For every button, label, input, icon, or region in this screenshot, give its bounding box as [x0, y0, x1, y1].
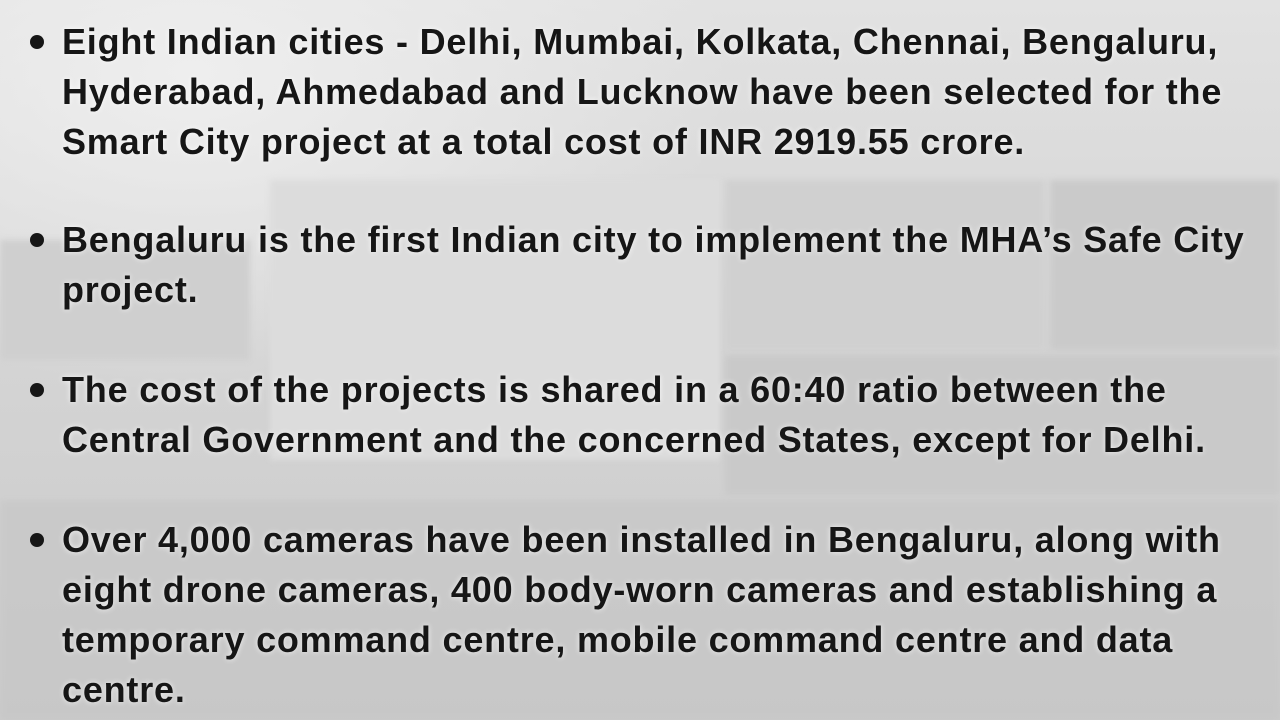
- bullet 4: cameras: Over 4,000 cameras have been installed in Bengaluru, along with: [62, 519, 1221, 560]
- bullet 3: cost sharing: Central Government and the concerned States, except for Delhi.: [62, 419, 1206, 460]
- bullet 2: Bengaluru first: Bengaluru is the first Indian city to implement the MHA’s Safe City: [62, 219, 1244, 260]
- bullet 3: cost sharing: The cost of the projects is shared in a 60:40 ratio between the: [62, 369, 1167, 410]
- bullet 1: eight cities: Eight Indian cities - Delhi, Mumbai, Kolkata, Chennai, Bengaluru,: [62, 21, 1218, 62]
- bullet 2: Bengaluru first: project.: [62, 269, 198, 310]
- bullet 1: eight cities: Smart City project at a total cost of INR 2919.55 crore.: [62, 121, 1025, 162]
- bullet 4: cameras: centre.: [62, 669, 186, 710]
- bullet 2: Bengaluru first: [30, 219, 1244, 310]
- bullet 1: eight cities: Hyderabad, Ahmedabad and Lucknow have been selected for the: [62, 71, 1222, 112]
- bullet 4: cameras: [30, 519, 1221, 710]
- bullet 4: cameras: temporary command centre, mobile command centre and data: [62, 619, 1173, 660]
- bullet 3: cost sharing: [30, 369, 1206, 461]
- bullet 4: cameras: eight drone cameras, 400 body-worn cameras and establishing a: [62, 569, 1217, 610]
- bullet 1: eight cities: [30, 21, 1222, 162]
